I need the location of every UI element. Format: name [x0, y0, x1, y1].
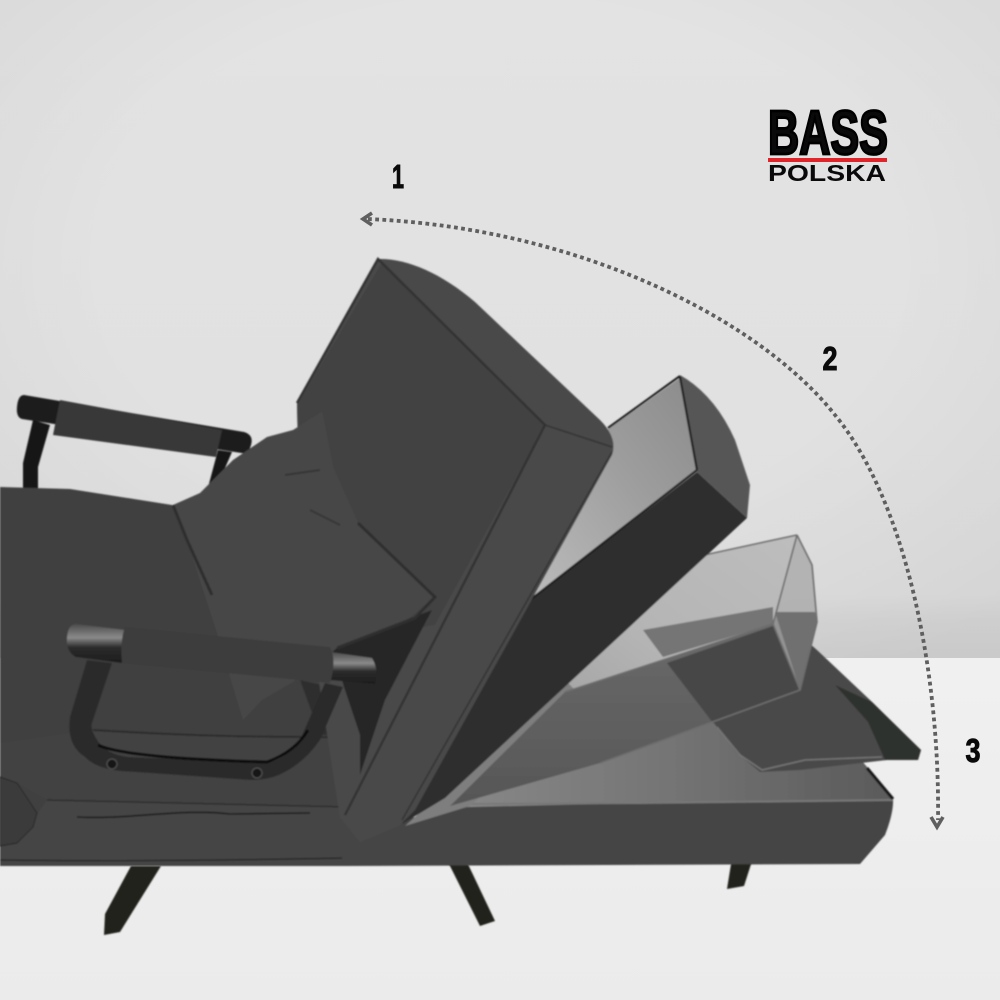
pillow dark corner: [835, 685, 921, 760]
middle cushion side: [680, 375, 750, 518]
front arm cap left: [67, 624, 125, 663]
bracket bolt left: [107, 759, 117, 769]
flat seat position 3: [340, 690, 893, 866]
back cushion position 2: [402, 375, 750, 824]
step number 1: 1: [392, 158, 404, 195]
ghost 3 front band: [450, 624, 800, 806]
middle cushion dark band: [402, 472, 747, 824]
rear arm metal bar: [17, 395, 252, 454]
rear arm padding: [53, 400, 222, 457]
hinge gap filler: [405, 680, 585, 826]
seat band piping: [93, 730, 353, 737]
back cushion piping: [297, 259, 545, 815]
pillow main: [173, 412, 435, 720]
ghost 3 outline: [565, 535, 817, 763]
dotted curve: [368, 219, 938, 820]
bracket bolt right: [252, 768, 262, 778]
pocket seam: [77, 812, 310, 817]
pillow crease: [285, 470, 340, 525]
main back cushion: [297, 259, 614, 842]
pillow body: [640, 600, 921, 772]
seat front band: [0, 730, 362, 807]
step number 2: 2: [822, 340, 838, 377]
ghost 3 top face: [430, 535, 797, 808]
D-shaped bracket: [69, 660, 343, 780]
shadow under pillow: [332, 610, 432, 775]
middle cushion piping: [402, 376, 697, 822]
ghost 3 lower side over pillow: [775, 612, 817, 690]
step number 3: 3: [966, 732, 980, 769]
rear armrest: [17, 395, 252, 495]
flat seat corner: [867, 768, 893, 799]
sofa illustration: [0, 259, 921, 866]
flat seat piping: [470, 800, 893, 804]
ghost 3 pillow show-through: [643, 607, 773, 657]
logo red rule: [768, 158, 887, 162]
flat seat base: [340, 798, 893, 866]
left fold: [0, 777, 37, 846]
front arm padding: [121, 627, 334, 683]
ghost 3 pillow overlay: [667, 626, 800, 723]
left pillow: [173, 412, 435, 720]
BASS Polska logo: [768, 99, 888, 186]
rotation arrow dotted arc: [363, 213, 943, 827]
pocket bottom edge: [0, 858, 345, 861]
logo word BASS: BASS: [768, 99, 888, 168]
background vignette: [0, 0, 1000, 660]
lower pocket: [0, 800, 360, 866]
pillow stitched hem: [717, 727, 882, 770]
middle cushion grey face: [530, 378, 698, 600]
front armrest: [67, 624, 376, 780]
ghost 3 side: [773, 535, 817, 690]
back cushion silhouette: [297, 259, 614, 842]
back cushion position 3 ghost: [405, 535, 817, 826]
pillow hem: [173, 505, 435, 648]
background wall: [0, 0, 1000, 660]
rear arm bracket left: [23, 420, 50, 489]
flat seat top: [430, 690, 893, 808]
background floor: [0, 658, 1000, 1000]
pocket top edge: [47, 800, 350, 807]
arrowhead bottom: [931, 817, 943, 827]
seat dark rear gap: [300, 680, 358, 735]
rear arm bracket right: [206, 450, 232, 495]
seat cushion left: [0, 487, 362, 866]
bracket highlight: [98, 730, 308, 762]
front arm cap right: [330, 652, 376, 684]
right pillow: [640, 600, 921, 772]
arrowhead top: [363, 213, 372, 225]
logo word POLSKA: POLSKA: [768, 160, 886, 186]
sofa legs: [104, 858, 753, 935]
back cushion inner piping: [402, 425, 612, 820]
back cushion face: [297, 264, 545, 640]
